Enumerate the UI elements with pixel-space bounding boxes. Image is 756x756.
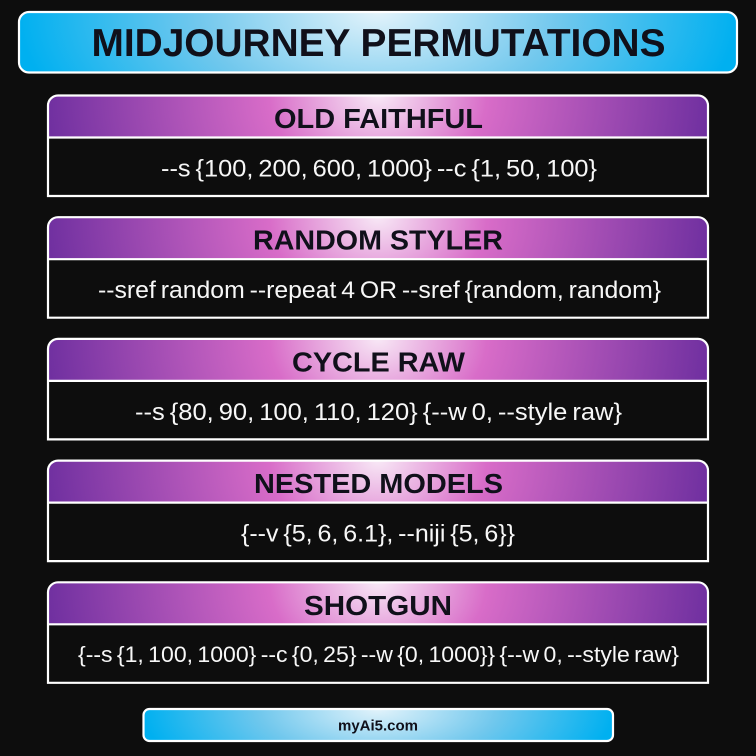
panel: cycle raw: CYCLE RAW (292, 346, 466, 377)
panel: random styler (48, 217, 708, 318)
panel: old faithful: --s {100, 200, 600, 1000} --c {1, 50, 100} (161, 156, 597, 182)
panel: old faithful (48, 96, 708, 196)
footer: myAi5.com (338, 718, 418, 734)
panel: nested models: NESTED MODELS (254, 468, 503, 499)
panel: shotgun: SHOTGUN (304, 590, 452, 621)
footer (144, 709, 613, 741)
title (19, 12, 737, 72)
panel: nested models: {--v {5, 6, 6.1}, --niji {5, 6}} (241, 521, 515, 548)
panel: random styler: RANDOM STYLER (253, 225, 503, 256)
panel: shotgun: {--s {1, 100, 1000} --c {0, 25} --w {0, 1000}} {--w 0, --style raw} (78, 642, 679, 667)
panel: nested models (48, 461, 708, 561)
panel: random styler: --sref random --repeat 4 OR --sref {random, random} (98, 277, 661, 304)
panel: old faithful: OLD FAITHFUL (274, 103, 483, 134)
panel: cycle raw (48, 339, 708, 439)
panel: shotgun (48, 582, 708, 683)
panel: cycle raw: --s {80, 90, 100, 110, 120} {--w 0, --style raw} (135, 399, 622, 426)
title: MIDJOURNEY PERMUTATIONS (92, 22, 666, 65)
